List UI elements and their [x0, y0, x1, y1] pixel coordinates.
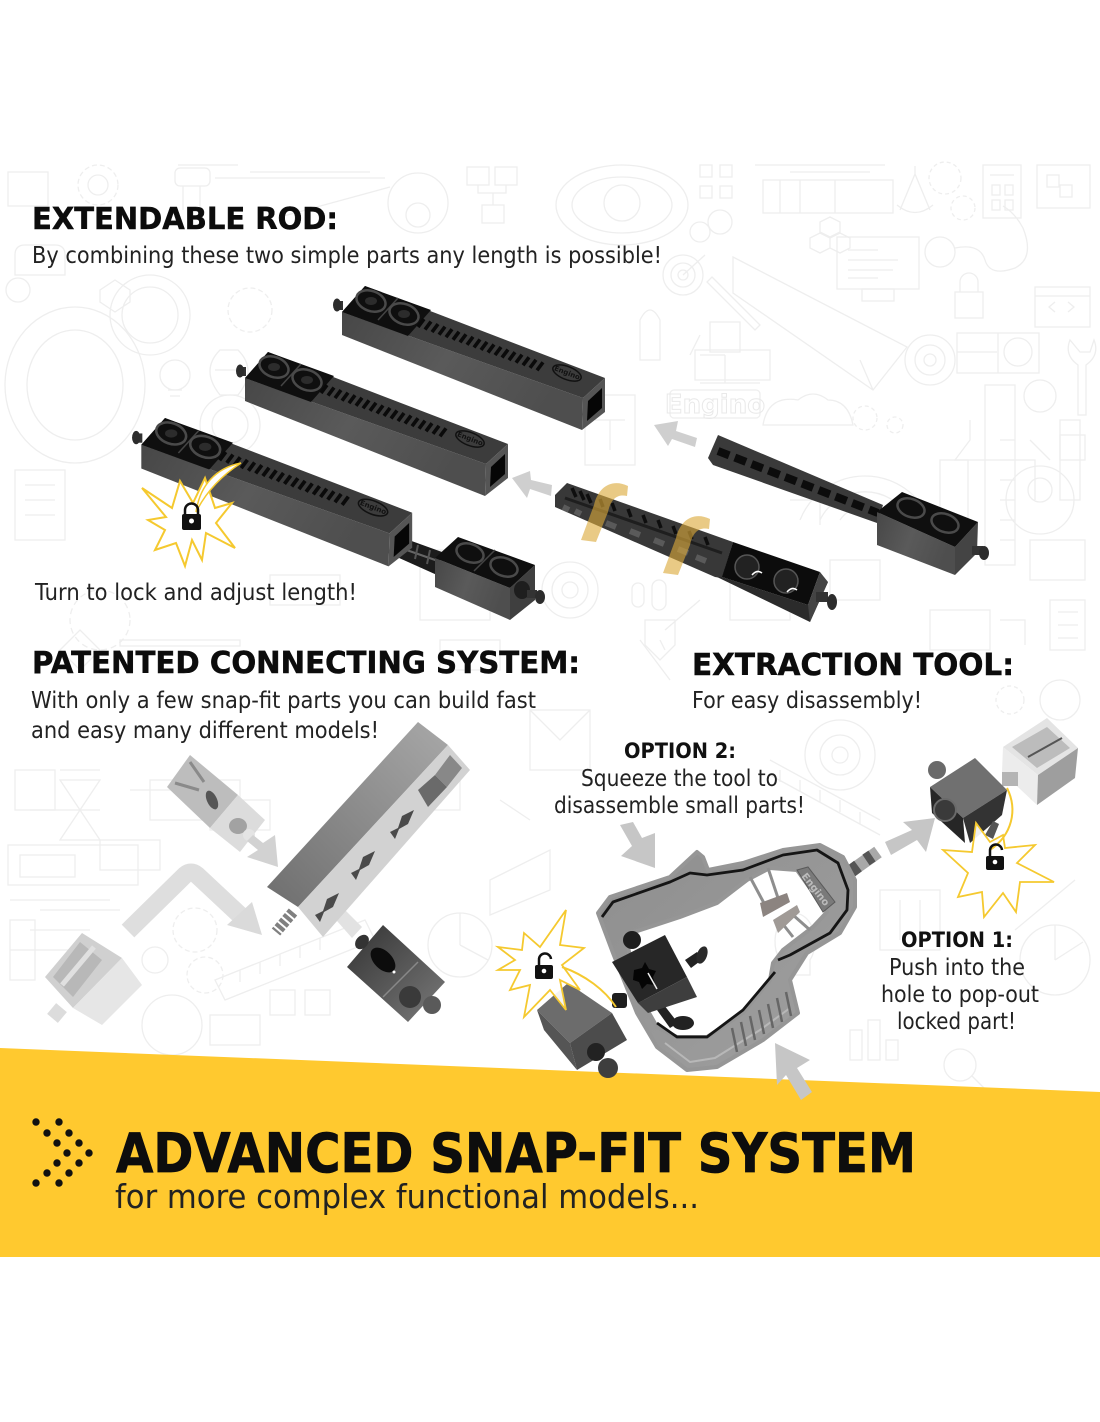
text: option 1: hole to pop-out — [881, 982, 1039, 1008]
dark cube — [347, 925, 445, 1022]
starburst: lock on rod — [142, 463, 241, 566]
black cube in tool — [612, 931, 710, 1030]
background doodles: Engino — [665, 390, 765, 420]
text: option 1: Push into the — [889, 955, 1025, 981]
heading: extendable rod: EXTENDABLE ROD: — [32, 202, 338, 237]
text: patented description: With only a few snap-fit parts you can build fast — [31, 688, 536, 714]
text: option 2 — [554, 739, 805, 819]
background doodles — [5, 162, 1096, 1094]
text: turn to lock: Turn to lock and adjust length! — [34, 580, 357, 606]
rod: assembled tube with extension — [132, 418, 545, 620]
arrow: into right cube — [885, 818, 935, 855]
rod: middle tube — [236, 352, 508, 496]
arrow: clip into beam — [247, 835, 278, 867]
small snap clip — [167, 755, 265, 852]
grey cube with pin — [537, 983, 627, 1078]
connector beam — [267, 722, 470, 938]
text: option 1: OPTION 1: — [901, 928, 1013, 952]
rod: top tube — [333, 286, 605, 430]
banner subtitle: for more complex functional models... — [115, 1177, 699, 1216]
arrow: into middle tube — [512, 471, 552, 498]
inner rod with rotation bands — [555, 483, 837, 622]
text: option 2: disassemble small parts! — [554, 793, 805, 819]
banner title: ADVANCED SNAP-FIT SYSTEM — [116, 1122, 916, 1185]
arrow: into top tube — [654, 421, 697, 447]
arrow: push up from bottom — [775, 1043, 812, 1100]
starburst: unlock right — [943, 788, 1054, 917]
extension rod with block — [708, 435, 989, 575]
text: option 1: locked part! — [897, 1009, 1016, 1035]
arrow: squeeze from top — [620, 822, 655, 868]
right cube pair — [928, 718, 1078, 843]
text: extraction description: For easy disassembly! — [692, 688, 922, 714]
text: patented description: and easy many different models! — [31, 718, 379, 744]
extraction tool: Engino — [799, 871, 831, 909]
yellow banner — [0, 1048, 1100, 1257]
text: patented description — [31, 688, 536, 744]
text: option 2: Squeeze the tool to — [581, 766, 778, 792]
extraction tool — [598, 845, 878, 1070]
text: option 2: OPTION 2: — [624, 739, 736, 763]
heading: patented connecting system: PATENTED CONNECTING SYSTEM: — [32, 646, 580, 681]
icon: dotted chevrons — [32, 1118, 93, 1187]
heading: extraction tool: EXTRACTION TOOL: — [692, 648, 1014, 683]
text: option 1 — [881, 928, 1039, 1035]
arrow: bent arrow into beam — [128, 872, 262, 935]
light cube — [45, 933, 142, 1025]
starburst: unlock left — [498, 910, 616, 1017]
text: extendable rod description: By combining these two simple parts any length is possible! — [32, 243, 662, 269]
